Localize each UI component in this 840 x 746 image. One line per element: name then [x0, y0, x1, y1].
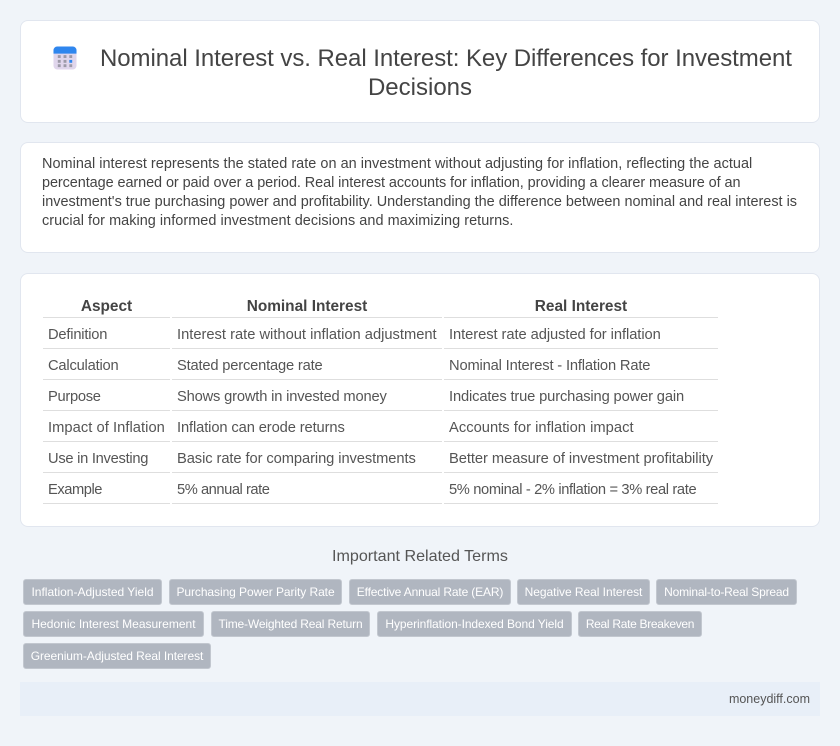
title: Decisions: [368, 74, 472, 101]
row: example: Example: [48, 482, 102, 498]
intro text: crucial for making informed investment decisions and maximizing returns.: [42, 213, 514, 229]
tag: Negative Real Interest: [525, 585, 642, 599]
tag: [23, 579, 162, 605]
tag: [578, 611, 702, 637]
row: calculation: Nominal Interest - Inflation Rate: [449, 358, 650, 374]
tag: Greenium-Adjusted Real Interest: [31, 649, 203, 663]
row: definition: [48, 327, 661, 343]
tag: Time-Weighted Real Return: [218, 617, 363, 631]
tag: Hedonic Interest Measurement: [31, 617, 196, 631]
row: purpose: [48, 389, 684, 405]
row: use in investing: [48, 451, 713, 467]
title: Nominal Interest vs. Real Interest: Key Differences for Investment: [100, 45, 792, 72]
related terms tags: [23, 579, 797, 669]
tag: [169, 579, 342, 605]
row: definition: Interest rate without inflation adjustment: [177, 327, 437, 343]
row: definition: Definition: [48, 327, 107, 343]
tag: Hyperinflation-Indexed Bond Yield: [385, 617, 564, 631]
intro text: percentage earned or paid over a period. Real interest accounts for inflation, providing a clearer measure of an: [42, 175, 740, 191]
tag: Real Rate Breakeven: [586, 617, 694, 631]
title: [100, 45, 792, 101]
row: example: 5% annual rate: [177, 482, 270, 498]
tag: [349, 579, 511, 605]
tag: Purchasing Power Parity Rate: [176, 585, 335, 599]
row: use in investing: Better measure of investment profitability: [449, 451, 713, 467]
related terms heading: Important Related Terms: [332, 547, 508, 565]
row: definition: Interest rate adjusted for inflation: [449, 327, 661, 343]
row: example: [48, 482, 696, 498]
tag: Inflation-Adjusted Yield: [31, 585, 154, 599]
table header: Aspect: [81, 298, 132, 315]
tag: [377, 611, 572, 637]
row: use in investing: Basic rate for comparing investments: [177, 451, 416, 467]
comparison table panel: [20, 273, 820, 527]
footer bar: [20, 682, 820, 716]
table header: [81, 298, 627, 315]
row: purpose: Shows growth in invested money: [177, 389, 387, 405]
row: calculation: Stated percentage rate: [177, 358, 322, 374]
row: impact of inflation: [48, 420, 634, 436]
tag: Nominal-to-Real Spread: [664, 585, 789, 599]
row: use in investing: Use in Investing: [48, 451, 148, 467]
intro text: investment's true purchasing power and profitability. Understanding the difference between nominal and real interest is: [42, 194, 797, 210]
intro panel: [20, 142, 820, 253]
row: purpose: Purpose: [48, 389, 101, 405]
tag: [517, 579, 650, 605]
tag: [23, 643, 211, 669]
tag: [656, 579, 797, 605]
row: example: 5% nominal - 2% inflation = 3% real rate: [449, 482, 696, 498]
table header: Nominal Interest: [247, 298, 367, 315]
tag: [211, 611, 370, 637]
tag: Effective Annual Rate (EAR): [357, 585, 503, 599]
tag: [23, 611, 204, 637]
row: impact of inflation: Impact of Inflation: [48, 420, 165, 436]
row: calculation: [48, 358, 650, 374]
source: moneydiff.com: [729, 692, 810, 706]
row: purpose: Indicates true purchasing power gain: [449, 389, 684, 405]
row: impact of inflation: Accounts for inflation impact: [449, 420, 634, 436]
row: calculation: Calculation: [48, 358, 118, 374]
header panel: [20, 20, 820, 123]
row: impact of inflation: Inflation can erode returns: [177, 420, 345, 436]
icon: calendar: [53, 46, 77, 70]
intro text: Nominal interest represents the stated rate on an investment without adjusting for inflation, reflecting the actual: [42, 156, 752, 172]
table header: Real Interest: [535, 298, 627, 315]
intro text: [42, 156, 797, 229]
